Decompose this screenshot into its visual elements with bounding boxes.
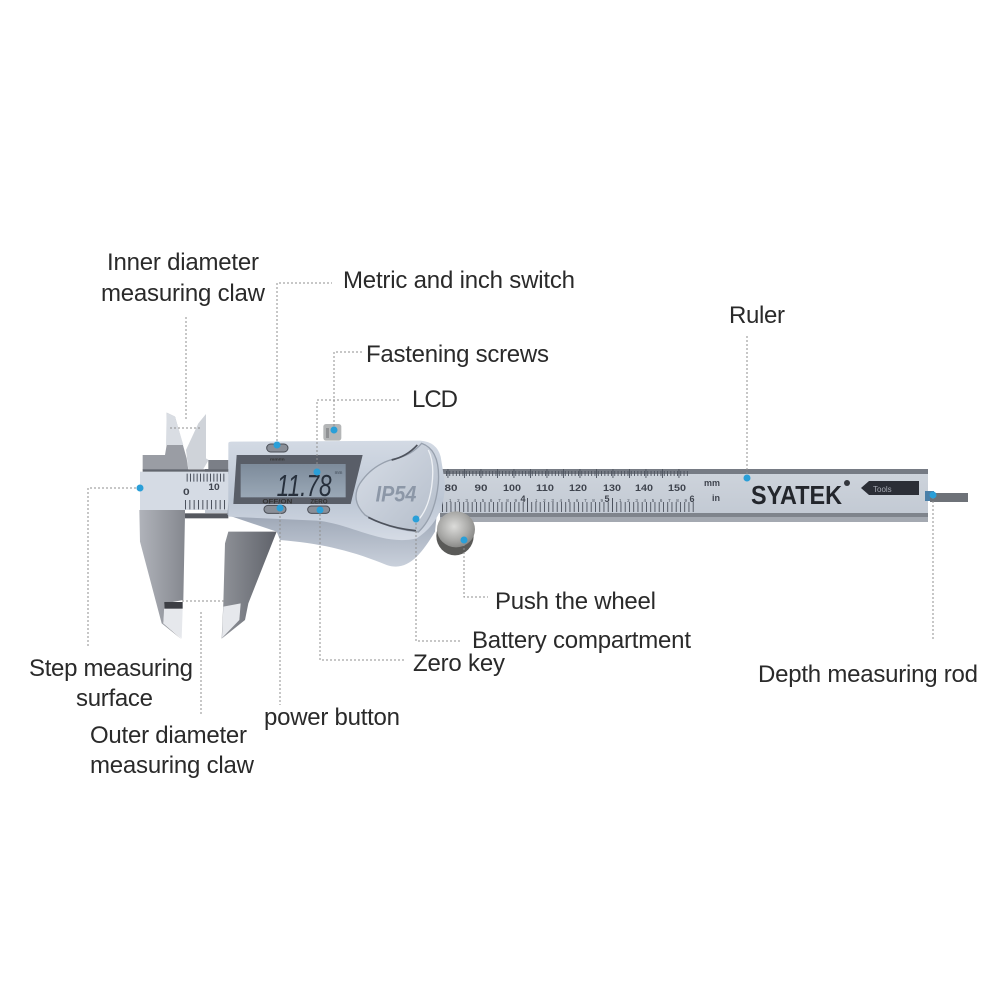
label: inner diameter measuring claw [101,249,266,307]
label: outer diameter measuring claw: Outer diameter [90,722,247,749]
ruler numbers: 120 [569,483,587,493]
brand logo: SYATEK [751,480,842,510]
step measuring surface: 0 [183,487,190,497]
ruler numbers: in [712,493,720,503]
label: inner diameter measuring claw: measuring claw [101,280,266,307]
outer diameter claws [139,510,277,639]
ruler numbers: 5 [604,494,610,504]
label: LCD: LCD [412,386,458,413]
label: power button: power button [264,704,400,731]
step measuring surface: 10 [208,482,220,492]
label: push the wheel: Push the wheel [495,588,656,615]
battery cover [356,443,439,532]
button labels [262,457,328,505]
label: step measuring surface: surface [76,685,153,712]
push wheel [436,511,475,555]
display body [227,424,475,567]
ruler numbers: 80 [444,483,458,493]
label: step measuring surface: Step measuring [29,655,193,682]
button labels: ZERO [310,499,328,505]
button labels: mm/in [270,457,285,461]
tools tag [861,481,919,495]
label: inner diameter measuring claw: Inner diameter [107,249,259,276]
caliper illustration [139,413,968,639]
ruler numbers: 90 [474,483,488,493]
ruler numbers: 1 2 3 4 5 6 7 8 9 [535,498,603,503]
LCD screen [233,455,363,504]
ruler numbers: 1 2 3 4 5 6 7 8 9 [619,498,687,503]
label: zero key: Zero key [413,650,505,677]
label: metric and inch switch: Metric and inch switch [343,267,575,294]
fastening screw [323,424,341,441]
depth measuring rod [925,491,968,502]
ruler [205,469,968,522]
ruler numbers: 100 [503,483,521,493]
label: ruler: Ruler [729,302,785,329]
step measuring surface [140,469,229,510]
ruler numbers: 140 [635,483,653,493]
tools tag: Tools [873,485,892,494]
ruler scale ticks [442,474,697,507]
buttons [264,444,330,513]
leader lines [88,283,933,715]
ruler numbers [444,478,720,504]
LCD screen: mm [335,470,343,475]
jaws and slider [139,413,277,639]
ruler numbers: 110 [536,483,554,493]
label: outer diameter measuring claw [90,722,255,779]
battery cover: IP54 [376,482,416,507]
button labels: OFF/ON [262,499,292,505]
ruler numbers: mm [704,478,720,488]
ruler numbers: 1 2 3 4 5 6 7 8 9 [449,498,517,503]
ruler numbers: 150 [668,483,686,493]
ruler numbers: 4 [520,494,526,504]
ruler numbers: 130 [603,483,621,493]
label: step measuring surface [29,655,193,712]
label: outer diameter measuring claw: measuring claw [90,752,255,779]
ruler numbers: 6 [689,494,695,504]
LCD screen: 11.78 [277,469,332,503]
label: fastening screws: Fastening screws [366,341,549,368]
label: battery compartment: Battery compartment [472,627,691,654]
inner diameter claws [143,413,228,472]
label: depth measuring rod: Depth measuring rod [758,661,978,688]
marker dots [136,426,936,544]
